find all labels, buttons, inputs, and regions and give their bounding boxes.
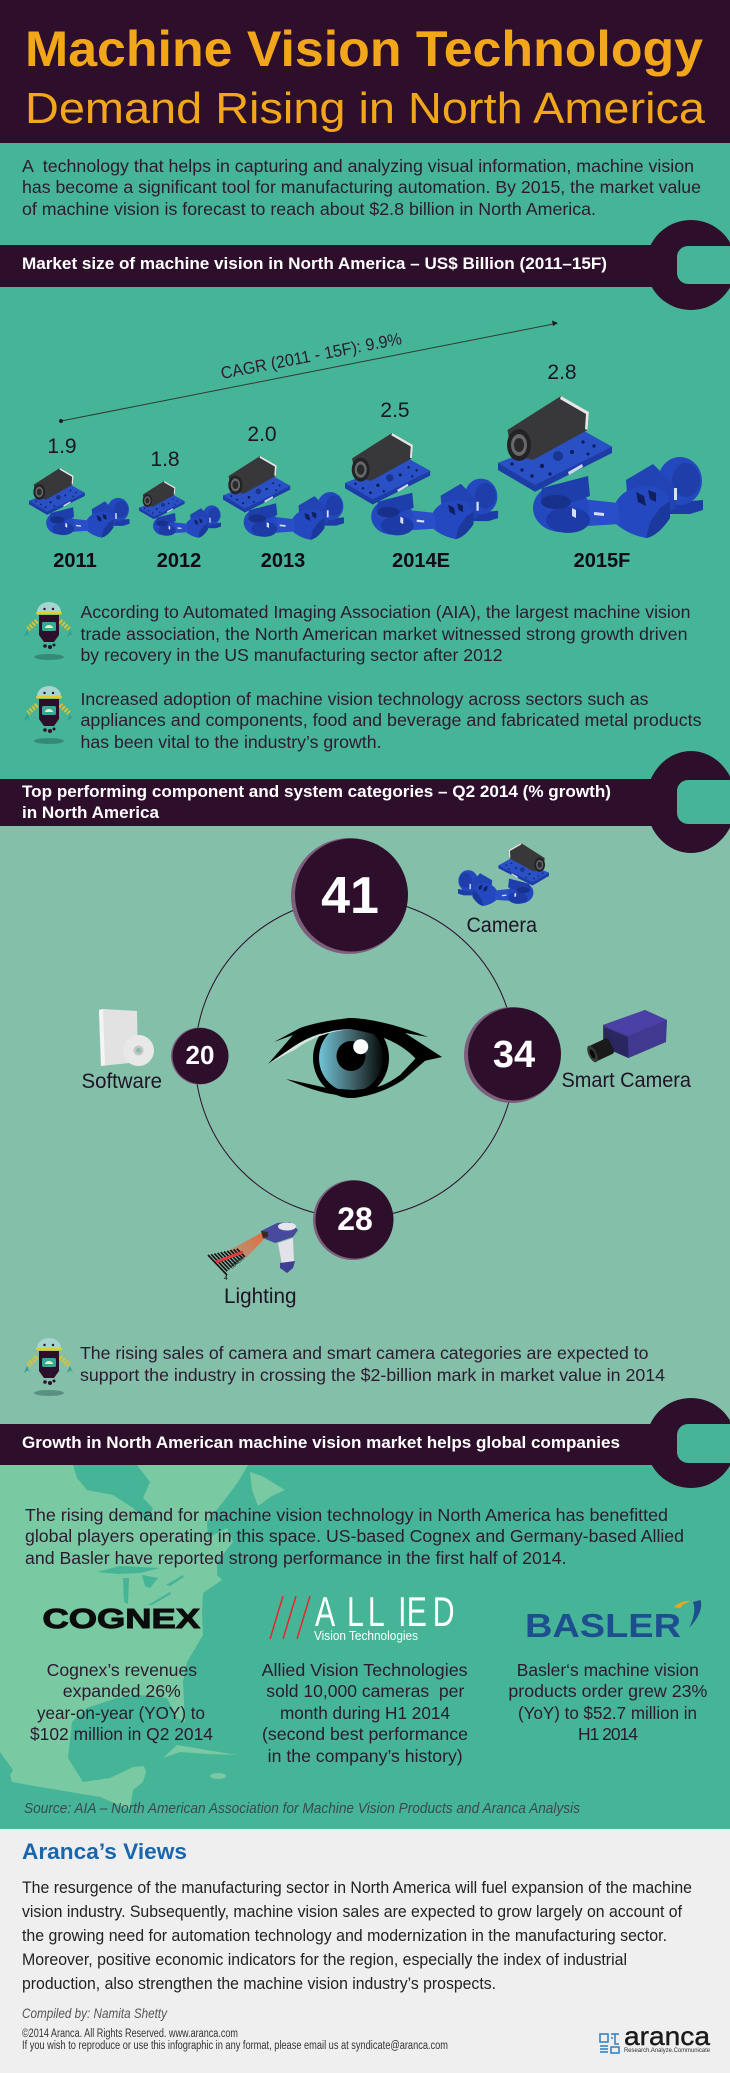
paragraph: rising demand: global players operating in this space. US-based Cognex and Germany-based Allied xyxy=(25,1526,684,1546)
stat: camera 41 xyxy=(291,838,408,954)
source note: Source: AIA – North American Association for Machine Vision Products and Aranca Analysis xyxy=(24,1800,580,1817)
stat: lighting 28 xyxy=(313,1180,394,1260)
label: Software: Software xyxy=(82,1070,162,1093)
intro text: of machine vision is forecast to reach about $2.8 billion in North America. xyxy=(22,199,596,219)
paragraph: rising demand xyxy=(25,1505,684,1568)
stat: software 20 xyxy=(171,1028,228,1084)
bullet: adoption across sectors: appliances and components, food and beverage and fabricated metal products xyxy=(80,710,702,730)
bullet: AIA growth: by recovery in the US manufacturing sector after 2012 xyxy=(80,645,503,665)
company text: Basler xyxy=(508,1660,707,1744)
bar: 2015F: 2.8 xyxy=(547,361,577,384)
views paragraph: The resurgence of the manufacturing sector in North America will fuel expansion of the machine xyxy=(22,1878,692,1897)
eye xyxy=(268,1018,442,1098)
views paragraph: vision industry. Subsequently, machine vision sales are expected to grow largely on account of xyxy=(22,1902,682,1921)
title: Machine Vision Technology xyxy=(25,21,703,77)
map of North America xyxy=(0,1465,285,1810)
bar: 2011: 2011 xyxy=(53,550,97,572)
section bar: top performing categories: Top performing component and system categories – Q2 2014 (% growth) xyxy=(22,782,611,801)
bar: 2015F xyxy=(498,361,703,572)
company text: Allied: Allied Vision Technologies xyxy=(262,1660,468,1680)
company text: Cognex: $102 million in Q2 2014 xyxy=(30,1724,213,1744)
company text: Cognex: year-on-year (YOY) to xyxy=(37,1703,205,1723)
panel: Aranca's views xyxy=(0,1829,730,2073)
section bar: top performing categories xyxy=(0,751,730,853)
stat: smart camera 34 xyxy=(464,1007,561,1103)
logo: Basler xyxy=(525,1600,701,1644)
CAGR arrow: CAGR (2011 - 15F): 9.9% xyxy=(219,329,403,383)
stat: smart camera 34: 34 xyxy=(493,1034,535,1076)
icon: barcode scanner: 4 xyxy=(224,1275,228,1282)
intro text: has become a significant tool for manufacturing automation. By 2015, the market value xyxy=(22,177,701,197)
intro text: A technology that helps in capturing and analyzing visual information, machine vision xyxy=(22,156,694,176)
background: green top section xyxy=(0,143,730,826)
stat: software 20: 20 xyxy=(186,1040,214,1070)
company text: Cognex: Cognex’s revenues xyxy=(47,1660,197,1680)
stat: camera 41: 41 xyxy=(321,867,379,925)
bullet: AIA growth: trade association, the North American market witnessed strong growth driven xyxy=(80,624,688,644)
company text: Basler: products order grew 23% xyxy=(508,1681,707,1701)
section bar: global companies: Growth in North American machine vision market helps global companies xyxy=(22,1433,620,1452)
title: Demand Rising in North America xyxy=(25,84,706,133)
title xyxy=(25,21,706,133)
header band xyxy=(0,0,730,143)
company text: Cognex: expanded 26% xyxy=(63,1681,181,1701)
bar: 2014E xyxy=(345,399,498,572)
company text: Cognex xyxy=(30,1660,213,1744)
bullet: camera categories: support the industry in crossing the $2-billion mark in market value in 2014 xyxy=(80,1365,665,1385)
icon: smart camera xyxy=(585,1010,667,1064)
logo: Cognex: COGNEX xyxy=(42,1603,200,1634)
bar: 2015F: 2015F xyxy=(574,550,630,572)
label: Camera: Camera xyxy=(466,914,537,937)
bar: 2012: 2012 xyxy=(157,550,201,572)
heading: Aranca's Views: Aranca’s Views xyxy=(22,1839,187,1864)
ring xyxy=(195,898,515,1218)
icon: software box xyxy=(99,1009,154,1066)
label: Lighting: Lighting xyxy=(224,1285,296,1308)
bullet: camera categories: The rising sales of camera and smart camera categories are expected to xyxy=(80,1343,648,1363)
bar: 2012: 1.8 xyxy=(150,448,180,471)
company text: Allied: sold 10,000 cameras per xyxy=(266,1681,464,1701)
logo: Basler: BASLER xyxy=(525,1607,681,1644)
bar: 2011 xyxy=(29,435,129,572)
bar: 2014E: 2014E xyxy=(392,550,450,572)
bar: 2012 xyxy=(139,448,221,572)
stat: lighting 28: 28 xyxy=(337,1201,373,1237)
icon: barcode scanner: 094236 xyxy=(229,1255,246,1271)
intro text xyxy=(22,156,701,219)
company text: Allied xyxy=(262,1660,468,1766)
background: green company section xyxy=(0,1465,730,1829)
bullet: AIA growth: According to Automated Imaging Association (AIA), the largest machine vision xyxy=(80,602,690,622)
bullet: adoption across sectors: Increased adoption of machine vision technology across sectors such as xyxy=(80,689,649,709)
bullet: adoption across sectors xyxy=(24,686,702,752)
section bar: top performing categories: in North America xyxy=(22,803,160,822)
company text: Basler: Basler‘s machine vision xyxy=(517,1660,699,1680)
bullet: camera categories xyxy=(24,1338,665,1396)
logo: Aranca: Research.Analyze.Communicate xyxy=(624,2047,710,2054)
company text: Allied: in the company’s history) xyxy=(268,1746,463,1766)
copyright: If you wish to reproduce or use this infographic in any format, please email us at syndicate@aranca.com xyxy=(22,2040,448,2052)
company text: Basler: H1 2014 xyxy=(578,1724,638,1744)
logo: Aranca: aranca xyxy=(624,2021,711,2051)
bullet: AIA growth xyxy=(24,602,690,665)
bullet: adoption across sectors: has been vital to the industry’s growth. xyxy=(80,732,382,752)
copyright: ©2014 Aranca. All Rights Reserved. www.aranca.com xyxy=(22,2028,238,2040)
logo: Allied: Vision Technologies xyxy=(314,1629,418,1643)
background: pale green middle section xyxy=(0,826,730,1465)
bar: 2013: 2013 xyxy=(261,550,305,572)
CAGR arrow xyxy=(59,320,558,423)
copyright xyxy=(22,2028,448,2052)
views paragraph: the growing need for automation technology and modernization in the manufacturing sector. xyxy=(22,1926,667,1945)
paragraph: rising demand: The rising demand for machine vision technology in North America has benefitted xyxy=(25,1505,668,1525)
bar: 2013: 2.0 xyxy=(247,423,277,446)
views paragraph: production, also strengthen the machine vision industry’s prospects. xyxy=(22,1974,496,1993)
views paragraph: Moreover, positive economic indicators for the region, especially the index of industrial xyxy=(22,1950,627,1969)
label: Smart Camera: Smart Camera xyxy=(562,1069,691,1092)
icon: camera xyxy=(458,843,549,906)
section bar: market size: Market size of machine vision in North America – US$ Billion (2011–15F) xyxy=(22,254,607,273)
bar: 2013 xyxy=(223,423,344,572)
paragraph: rising demand: and Basler have reported strong performance in the first half of 2014. xyxy=(25,1548,566,1568)
bar: 2011: 1.9 xyxy=(47,435,77,458)
section bar: global companies xyxy=(0,1398,730,1488)
logo: Allied xyxy=(270,1588,455,1643)
company text: Allied: (second best performance xyxy=(262,1724,468,1744)
bar: 2014E: 2.5 xyxy=(380,399,410,422)
section bar: market size xyxy=(0,220,730,310)
company text: Basler: (YoY) to $52.7 million in xyxy=(518,1703,697,1723)
compiled by: Compiled by: Namita Shetty xyxy=(22,2005,168,2021)
views paragraph xyxy=(22,1878,692,1993)
company text: Allied: month during H1 2014 xyxy=(280,1703,450,1723)
logo: Allied: ALLIED xyxy=(315,1588,455,1635)
logo: Aranca xyxy=(600,2021,711,2054)
icon: barcode scanner xyxy=(208,1222,298,1282)
